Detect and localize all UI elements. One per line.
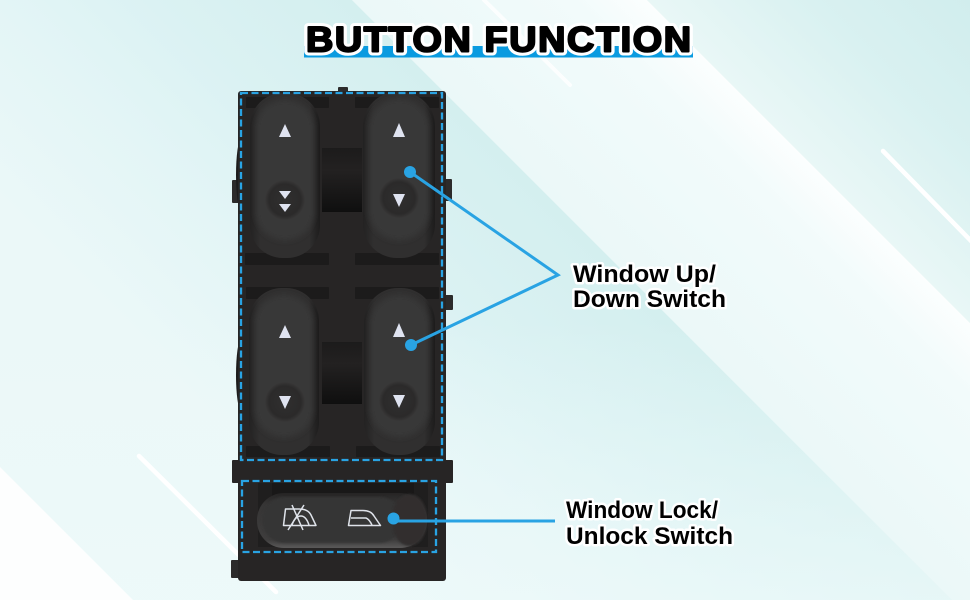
top right button [363, 92, 435, 258]
label: window lock/unlock switch [566, 497, 733, 550]
callout line: window lock [388, 512, 555, 524]
label: window up/down switch: Window Up/ [573, 261, 716, 288]
window switch device [231, 87, 453, 581]
label: window up/down switch [573, 261, 726, 313]
bottom right button [364, 288, 435, 455]
title: BUTTON FUNCTION [306, 20, 693, 59]
label: window lock/unlock switch: Window Lock/ [566, 497, 718, 524]
title: BUTTON FUNCTION [306, 20, 693, 59]
dashed frames [241, 93, 442, 552]
label: window lock/unlock switch: Unlock Switch [566, 523, 733, 550]
lock button [257, 483, 428, 548]
label: window up/down switch: Down Switch [573, 286, 726, 313]
bottom left button [249, 288, 319, 455]
callout lines: window switches [404, 166, 558, 351]
device body [231, 87, 453, 581]
icon: window locked [284, 505, 316, 530]
icon: window [348, 510, 380, 526]
top left button [250, 93, 320, 258]
